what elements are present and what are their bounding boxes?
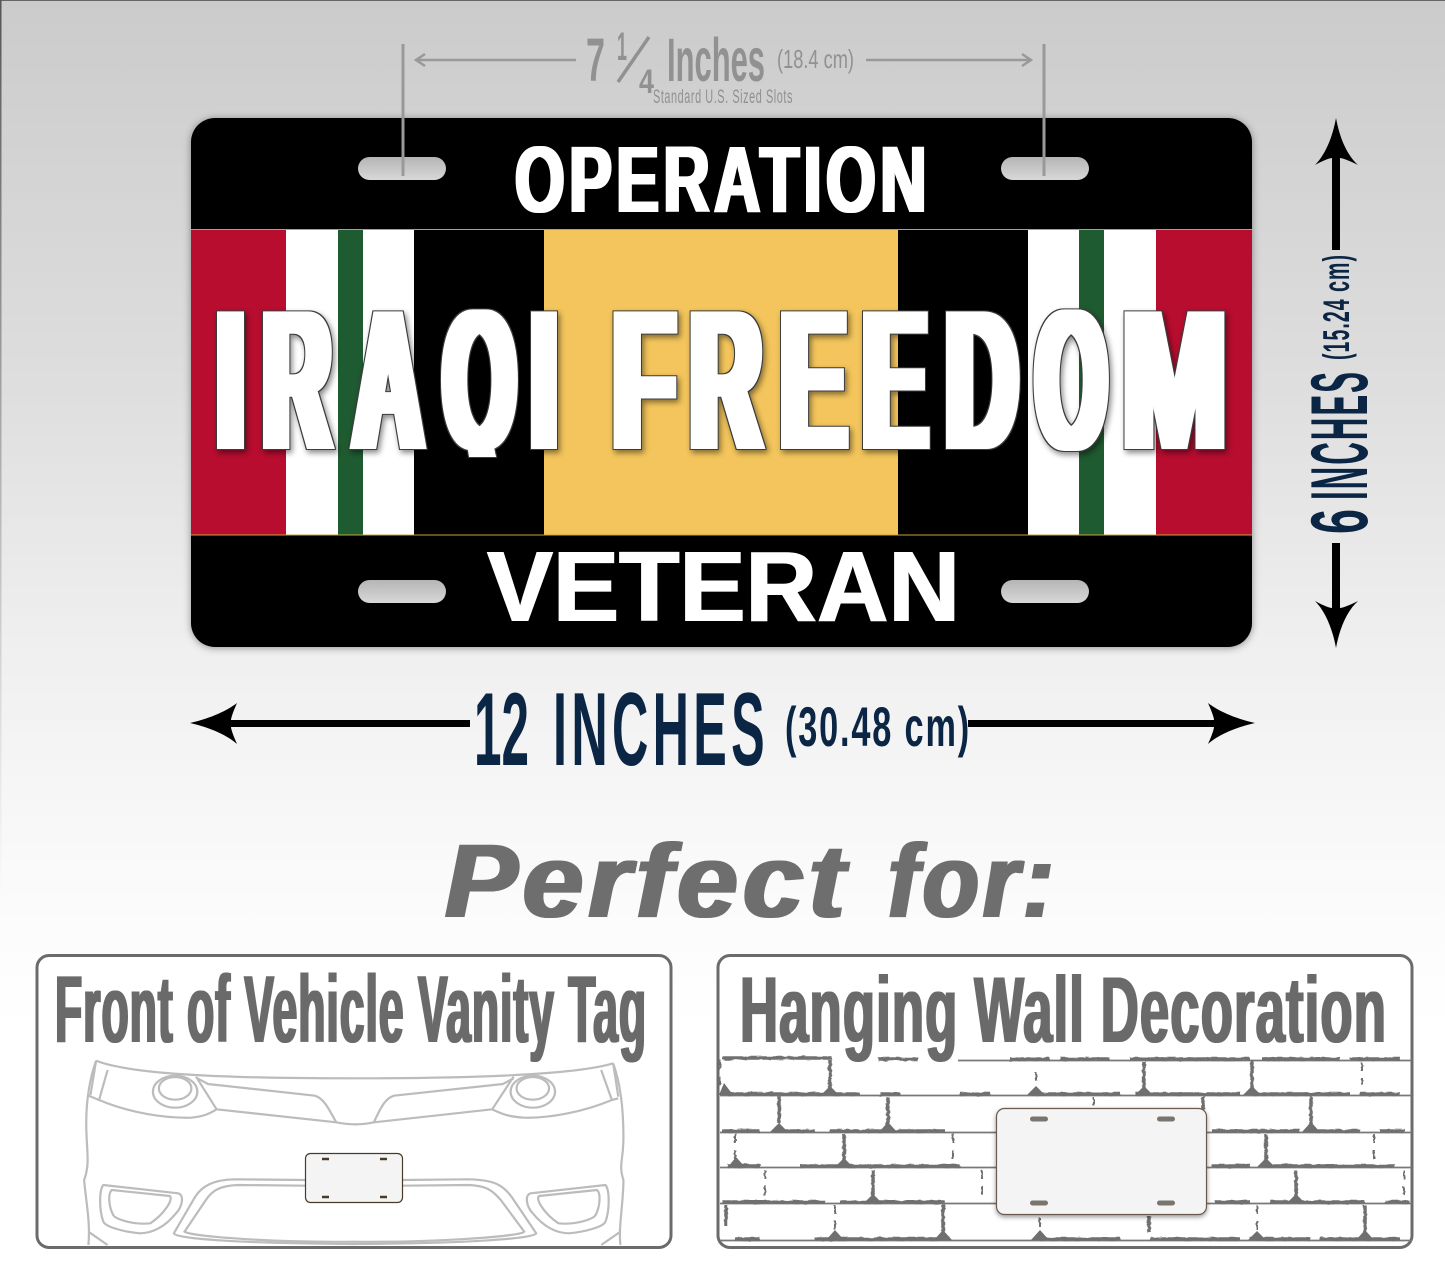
plate text: VETERAN: VETERAN — [487, 531, 960, 643]
panel: wall decoration — [718, 956, 1412, 1248]
plate text: IRAQI FREEDOM: D — [946, 269, 1018, 492]
width label: 12 — [474, 672, 529, 788]
height dimension: 6 inches — [1295, 118, 1385, 648]
plate text: IRAQI FREEDOM: I — [532, 269, 556, 492]
plate text: IRAQI FREEDOM: R — [263, 269, 330, 492]
brick wall — [719, 1058, 1412, 1240]
ribbon stripes — [191, 229, 1252, 536]
dimension label: 1 — [617, 25, 627, 69]
plate text: IRAQI FREEDOM: M — [1123, 269, 1226, 492]
dimension label: Standard U.S. Sized Slots — [653, 87, 793, 108]
dimension label — [586, 25, 854, 108]
height label: 6 — [1295, 509, 1385, 534]
plate text: IRAQI FREEDOM: O — [1036, 269, 1106, 492]
mounting slots — [358, 157, 1089, 603]
dimension label: 4 — [639, 63, 654, 101]
width dimension: 12 inches: INCHES — [553, 672, 769, 788]
license plate — [191, 118, 1252, 647]
dimension arrows — [416, 54, 1031, 66]
height dimension: 6 inches: INCHES — [1295, 370, 1385, 500]
plate text: OPERATION: OPERATION — [515, 127, 931, 233]
plate text: IRAQI FREEDOM: Q — [444, 269, 515, 492]
heading: Perfect for: Perfect — [445, 823, 850, 940]
dimension label: 7 — [586, 26, 605, 94]
thin mortar lines — [720, 1060, 1412, 1240]
width dimension: 12 inches — [190, 672, 1255, 788]
icon: car front outline — [84, 1061, 623, 1245]
plate text: IRAQI FREEDOM: F — [613, 269, 675, 492]
dimension label: (18.4 cm) — [777, 44, 854, 74]
height metric label: (15.24 cm) — [1316, 254, 1357, 360]
dimension label: Inches — [667, 26, 765, 94]
heading: Perfect for: for: — [888, 823, 1058, 940]
plate text: IRAQI FREEDOM — [214, 308, 1231, 459]
plate text: IRAQI FREEDOM: R — [691, 269, 761, 492]
page edge line — [0, 0, 1445, 2]
plate text: IRAQI FREEDOM: E — [863, 269, 927, 492]
text: Front of Vehicle Vanity Tag — [55, 956, 647, 1063]
plate text: IRAQI FREEDOM: I — [217, 269, 244, 492]
plate text: IRAQI FREEDOM: A — [354, 269, 423, 492]
width arrow — [190, 703, 1255, 744]
icon: small blank plate on car — [306, 1154, 402, 1202]
dimension ticks — [403, 44, 1044, 176]
panel: front of vehicle — [37, 956, 671, 1248]
mortar joints — [719, 1083, 1374, 1240]
icon: blank plate on wall — [996, 1108, 1206, 1214]
plate text: IRAQI FREEDOM: E — [781, 269, 846, 492]
rough mortar — [720, 1058, 1410, 1239]
height arrow — [1315, 118, 1358, 648]
width metric label: (30.48 cm) — [785, 695, 971, 758]
slot spacing dimension: 7 1/4 inches — [403, 25, 1044, 176]
